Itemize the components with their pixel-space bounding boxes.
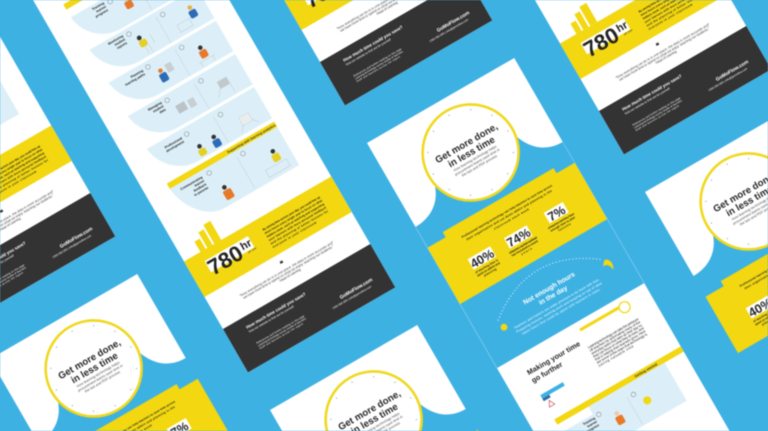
call to action: Learning technology survey results of teachers [354, 49, 404, 80]
stat: 74%: 74% [504, 226, 533, 250]
call to action: References and further reading on this page [353, 47, 403, 78]
row 2: monitoring: Monitoring [107, 34, 124, 46]
call to action: Learning technology survey results of teachers [633, 98, 683, 129]
stat: 40%: 40% [468, 247, 497, 271]
paragraph: yellow band text: By saving time across your day, you could free up [262, 195, 321, 232]
paragraph: yellow band text [262, 195, 332, 249]
yellow stats band [48, 374, 230, 431]
dotted arc [486, 239, 603, 320]
call to action: Visit our website to find out for yourself [624, 86, 671, 116]
hero white shape [0, 274, 186, 431]
row 5: development: Professional [164, 136, 183, 150]
paragraph: yellow band text: more hours every single year to focus on what [264, 199, 323, 235]
stat: 74%: years [520, 246, 533, 256]
call to action: References and further reading on this page [632, 96, 682, 127]
call to action: 1300 000 000 | info@gomoflow.com [707, 66, 749, 92]
paragraph: not enough hours: Teachers and trainers are under pressure to do more with less. [513, 277, 600, 330]
paragraph: yellow band text: matters most, such as teaching and supporting [266, 202, 325, 239]
row 6: communicating: to parents [193, 186, 209, 197]
row 4: managing: Managing [147, 101, 162, 112]
yellow stats band [702, 207, 768, 353]
row 1: tracking: progress [95, 8, 109, 19]
call to action: How much time could you save? [342, 24, 404, 63]
quote: "Now everything we do is in one place, the data is more accurate and" [615, 22, 711, 80]
row 1: tracking: learner [95, 4, 108, 14]
quote: "Now everything we do is in one place, the data is more accurate and" [239, 240, 335, 298]
quote: ❝ [279, 259, 286, 268]
stat: 780hr: per year [623, 28, 633, 36]
stat: 40%: spent on admin and [476, 261, 501, 277]
white lower section [497, 283, 744, 431]
hero white shape [270, 325, 466, 431]
section bar: supporting [167, 122, 277, 189]
row 5: development: development [165, 139, 186, 153]
hero circle [683, 136, 768, 267]
bar chart icon [565, 3, 597, 34]
subtitle: procurement teams save time in [454, 148, 501, 177]
paragraph: making your time [587, 317, 650, 368]
quote: Head of Learning [279, 268, 302, 283]
row 3: planning [109, 21, 233, 113]
row 6: communicating: learner [194, 178, 206, 188]
page: column 3 upper, infographic footer [253, 0, 492, 105]
call to action: GoMoFlow.com [715, 59, 750, 83]
row 1 [557, 363, 687, 431]
row 3: planning: learning paths [124, 72, 146, 87]
call to action: GoMoFlow.com [339, 277, 374, 301]
title: in less time [446, 135, 497, 170]
call to action: Learning technology survey results of teachers [257, 316, 307, 347]
quote: ❝ [655, 41, 662, 50]
paragraph: making your time: they can focus on what they do best, and [592, 326, 645, 359]
paragraph: yellow band text: everyone in your classroom [648, 2, 693, 31]
call to action: How much time could you save? [245, 291, 307, 330]
row header labels [598, 364, 667, 407]
paragraph: making your time: are some of the ways that technology is [596, 332, 648, 365]
title: Get more done, [434, 121, 500, 166]
yellow section bar: Getting started [634, 362, 658, 379]
footer section [549, 0, 768, 154]
page: column 1 lower, cover section [0, 274, 230, 431]
page: column 4 upper, infographic footer [532, 0, 768, 154]
row 4: managing [128, 54, 253, 146]
yellow stats band: classroom each week [493, 207, 530, 231]
row 6: communicating: Communicating [180, 175, 203, 191]
icon: moon [601, 257, 615, 273]
title: Get more done, [57, 337, 123, 382]
stat: 74% [501, 224, 542, 261]
stat: 40%: of teaching time is [474, 258, 499, 274]
yellow section bar [554, 346, 684, 425]
row 2: monitoring [90, 0, 214, 80]
stat: 74%: has increased in recent [511, 239, 539, 257]
call to action: How much time could you save? [621, 73, 683, 112]
subtitle: the last and PDF process [84, 370, 121, 394]
stat: 7%: enough time to plan [550, 215, 576, 233]
paragraph: making your time: Learning technology can take the pressure [587, 317, 639, 350]
call to action: 1300 000 000 | info@gomoflow.com [331, 284, 373, 310]
stat: 780hr [203, 233, 260, 280]
page: column 2 upper, long infographic [26, 0, 395, 372]
paragraph: yellow band text [0, 144, 52, 198]
stat: 780hr: hr [614, 19, 631, 35]
stat: 7%: lessons [557, 222, 572, 232]
quote [331, 0, 436, 37]
footer section [0, 125, 115, 321]
stat: 780hr: 780 [203, 240, 247, 280]
call to action: Staff and learners across the region [635, 103, 680, 132]
row 4: managing: data [159, 108, 167, 114]
quote: Head of Learning [376, 1, 399, 16]
hero white shape [645, 107, 768, 276]
row: final illustrated row [0, 76, 19, 176]
stat: 7%: 7% [545, 203, 568, 224]
row header labels: Without technology [598, 389, 625, 407]
stat: 780hr: 780 [579, 22, 623, 62]
page: column 2 lower, cover section [270, 325, 510, 431]
stat: 74%: of teachers say their workload [508, 235, 538, 255]
subtitle: the last and PDF process [461, 154, 498, 178]
quote: we have more time to spend on what we enjoy: teaching our students." [242, 244, 335, 300]
stat: 40%: planning [483, 267, 497, 277]
row 2: monitoring: reports [116, 41, 128, 50]
row 6: communicating: feedback [193, 182, 207, 193]
paragraph: yellow band text [638, 0, 708, 31]
call to action: 1300 000 000 | info@gomoflow.com [428, 17, 470, 43]
stat: 780hr: hr [238, 237, 255, 253]
call to action: References and further reading on this page [256, 314, 306, 345]
row 4: managing: student [152, 104, 165, 114]
row header labels: With technology [645, 364, 667, 380]
row 6: communicating [170, 127, 299, 227]
paragraph: making your time: that is helping their learners grow. Here [594, 329, 646, 362]
stat: 7% [540, 200, 579, 236]
section bar: supporting: Supporting with learning analytics [226, 123, 276, 154]
title: in less time [69, 351, 120, 386]
call to action: 1300 000 000 | info@gomoflow.com [51, 233, 93, 259]
bar chart icon [189, 221, 221, 252]
yellow stats band: their organisation and cut down admin and planning in the [466, 189, 553, 241]
subtitle: How learning technology helps [76, 360, 121, 388]
hero circle [405, 87, 536, 218]
call to action [621, 41, 752, 134]
subtitle: How learning technology helps [453, 144, 498, 172]
paragraph: not enough hours: Preparing lessons, marking work and keeping on top of data [516, 281, 603, 334]
yellow header bar with clock [579, 300, 632, 337]
paragraph: making your time: off teachers by automating many of the [589, 320, 641, 353]
row 1: tracking [66, 0, 196, 48]
paragraph: yellow band text: and the planning of better lessons for [270, 209, 330, 245]
heading: not enough hours: in the day [538, 285, 569, 307]
hero white shape [367, 58, 563, 227]
paragraph: not enough hours: takes hours that could be spent with learners in class. [521, 287, 601, 336]
call to action: Staff and learners across the region [356, 54, 401, 83]
call to action: Visit our website to find out for yourself [248, 304, 295, 334]
paragraph: making your time: saving valuable time [598, 344, 634, 368]
heading: not enough hours: Not enough hours [522, 271, 577, 307]
yellow stats band: Professional learning technology can help teachers to save time across [461, 183, 553, 239]
subtitle: procurement teams save time in [77, 364, 124, 393]
row 1: learner [586, 419, 599, 429]
row 5: development [147, 87, 272, 180]
row 3: planning: Planning [130, 69, 144, 79]
stat: 780hr [579, 15, 636, 62]
quote [0, 181, 58, 253]
heading: making your time go further: Making your time [525, 339, 582, 377]
stat: 40% [468, 246, 503, 280]
yellow section bar [63, 0, 174, 10]
row 1: Tracking [582, 416, 596, 426]
footer section [281, 0, 492, 105]
call to action: GoMoFlow.com [436, 10, 471, 34]
call to action [245, 259, 376, 352]
row 1: tracking: Tracking [91, 1, 105, 11]
call to action: Staff and learners across the region [259, 321, 304, 350]
paragraph: making your time: everyday tasks that take up their day so [591, 323, 643, 356]
yellow band start [328, 425, 510, 431]
yellow stats band [424, 158, 607, 304]
page: column 1 upper, infographic footer [0, 0, 115, 321]
hero circle [28, 303, 159, 431]
stat: 780hr: per year [247, 246, 257, 254]
stat: 7%: of teachers feel they have [547, 212, 575, 230]
call to action [0, 208, 96, 301]
page: column 3 lower, main cover page [367, 58, 744, 431]
quote: Head of Learning [655, 50, 678, 65]
page: column 4 lower, cover section [645, 107, 768, 353]
heading: making your time go further: go further [530, 360, 564, 385]
hero circle [308, 354, 439, 431]
quote: we have more time to spend on what we enjoy: teaching our students." [618, 26, 711, 82]
call to action: Visit our website to find out for yourself [345, 37, 392, 67]
paragraph: yellow band text: your learners with more personal feedback [268, 205, 327, 242]
blue key bar [540, 382, 570, 408]
call to action [342, 0, 473, 85]
icon: sun [499, 323, 509, 332]
row 2: monitoring: student [114, 37, 127, 47]
footer section [173, 157, 395, 372]
call to action: GoMoFlow.com [59, 226, 94, 250]
paragraph: yellow band text: everyone in your classroom [272, 220, 317, 249]
